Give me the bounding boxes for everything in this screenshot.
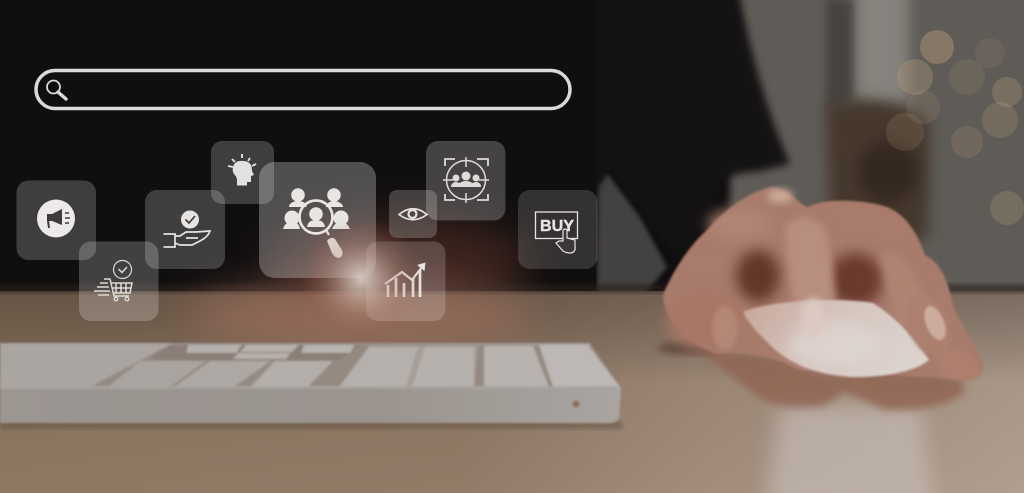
mouse xyxy=(743,300,929,377)
icon: open hand with check xyxy=(164,210,210,247)
bokeh lights xyxy=(886,30,1024,225)
panel: shopping cart tile xyxy=(79,242,158,321)
icon: fast cart with check xyxy=(94,260,132,301)
icon: megaphone xyxy=(37,200,75,238)
icon: target with people xyxy=(443,157,489,203)
icon: head with idea xyxy=(228,154,256,186)
shadow under hand xyxy=(700,350,965,410)
fingertips xyxy=(896,288,960,362)
glow flare xyxy=(299,217,423,341)
icon: people under magnifier xyxy=(283,188,350,258)
search bar xyxy=(36,70,570,108)
icon: magnifier xyxy=(47,80,66,99)
table surface xyxy=(0,283,1024,493)
panel: hand with check tile xyxy=(145,190,225,269)
fingers xyxy=(663,187,983,380)
panel: growth chart tile xyxy=(366,242,446,321)
icon: eye xyxy=(399,209,427,220)
buy label: BUY xyxy=(540,218,574,235)
hand on mouse xyxy=(658,187,986,410)
panel: light bulb head tile xyxy=(211,141,274,204)
panel: buy button tile xyxy=(518,190,598,269)
panel: megaphone tile xyxy=(16,180,96,260)
glass tiles xyxy=(16,141,598,321)
panel: audience search tile xyxy=(259,162,376,278)
panel: eye tile xyxy=(389,190,437,238)
icon: bar chart with arrow xyxy=(385,262,426,297)
keyboard xyxy=(0,343,621,423)
panel: target audience tile xyxy=(426,141,506,220)
